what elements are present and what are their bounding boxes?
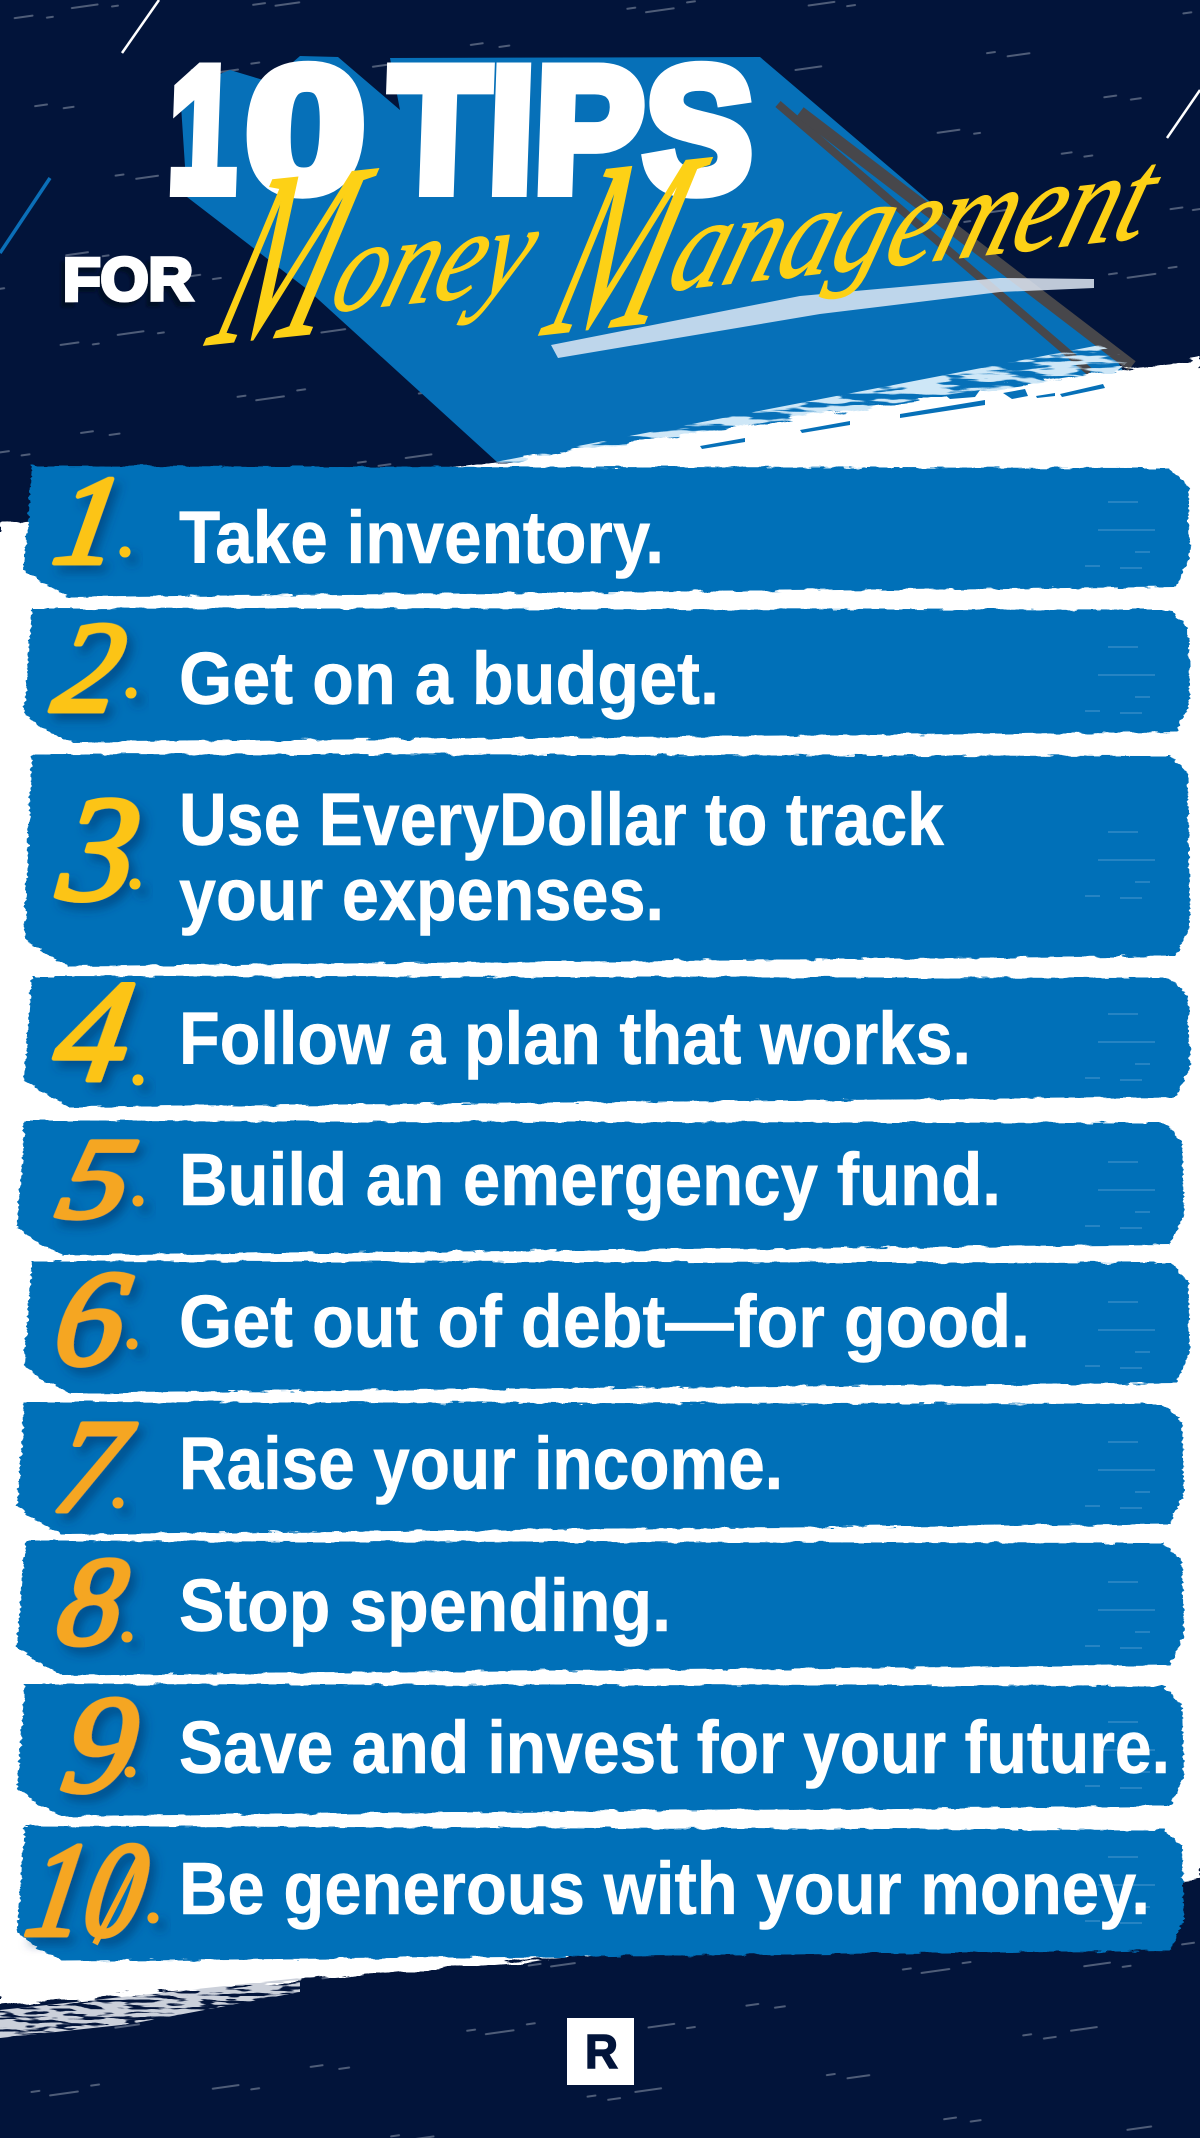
tip 10: 10 bbox=[17, 1816, 158, 1965]
thin accent lines bbox=[0, 0, 1200, 253]
gray shadow stripes bbox=[778, 104, 1132, 372]
underline swash bbox=[551, 278, 1094, 358]
tip 7: Raise your income. bbox=[179, 1422, 783, 1505]
tip 10 bbox=[17, 1816, 1184, 1965]
tip 9: 9 bbox=[53, 1668, 149, 1822]
tip 10: . bbox=[148, 1868, 163, 1936]
tip 3 bbox=[24, 754, 1190, 966]
light brush fringe on blue bbox=[480, 345, 1130, 478]
blue dashes on white bbox=[700, 384, 1105, 449]
tip 7: 7 bbox=[45, 1393, 142, 1540]
title: 10 TIPS: 1 bbox=[165, 30, 241, 229]
tip 5: Build an emergency fund. bbox=[179, 1138, 1001, 1221]
title: FOR: FOR bbox=[63, 246, 193, 313]
logo: R badge bbox=[567, 2018, 634, 2085]
tip 6: . bbox=[126, 1294, 142, 1362]
tip 6: Get out of debt—for good. bbox=[179, 1280, 1030, 1363]
tip 6 bbox=[24, 1243, 1190, 1394]
white centre panel bbox=[0, 358, 1200, 2006]
tip 4: Follow a plan that works. bbox=[179, 997, 971, 1080]
tip 4: 4 bbox=[44, 951, 145, 1112]
gray brush patch lower left bbox=[0, 1978, 300, 2038]
tip 8: 8 bbox=[49, 1533, 137, 1672]
tip 5: 5 bbox=[48, 1116, 147, 1243]
title: 10 TIPS: TIPS bbox=[385, 30, 757, 229]
tip 7: . bbox=[112, 1453, 128, 1521]
tip 5 bbox=[17, 1116, 1184, 1255]
tip 9: . bbox=[124, 1722, 140, 1790]
title extruded shadow bbox=[180, 56, 1140, 470]
title: Money script: M bbox=[186, 111, 398, 400]
tip 1: . bbox=[120, 502, 135, 570]
tip 3: . bbox=[130, 834, 145, 902]
tip 2: . bbox=[126, 643, 141, 711]
tip 9 bbox=[17, 1668, 1184, 1822]
tip 3: 3 bbox=[50, 766, 150, 932]
tip 4: . bbox=[132, 1030, 148, 1098]
tip 2: Get on a budget. bbox=[179, 637, 719, 720]
tip 1: Take inventory. bbox=[179, 496, 664, 579]
title: Money script: oney bbox=[317, 177, 558, 341]
logo: R badge: R bbox=[585, 2026, 618, 2079]
title: 10 TIPS: 0 bbox=[242, 30, 369, 229]
tip 1 bbox=[24, 450, 1190, 597]
tip 3: your expenses. bbox=[179, 853, 664, 936]
tip 3: Use EveryDollar to track bbox=[179, 778, 945, 861]
tip 8: Stop spending. bbox=[179, 1564, 671, 1647]
tip 7 bbox=[17, 1393, 1184, 1540]
tip 8 bbox=[17, 1533, 1184, 1675]
tip 2 bbox=[24, 596, 1190, 742]
tip 2: 2 bbox=[45, 596, 135, 740]
title: 10 TIPS bbox=[165, 30, 757, 229]
tip 6: 6 bbox=[45, 1243, 139, 1394]
tip 8: . bbox=[122, 1587, 137, 1655]
tip 5: . bbox=[132, 1151, 148, 1219]
tip 4 bbox=[24, 951, 1190, 1112]
title: Management script: M bbox=[521, 99, 731, 390]
tip 1: 1 bbox=[45, 450, 133, 591]
